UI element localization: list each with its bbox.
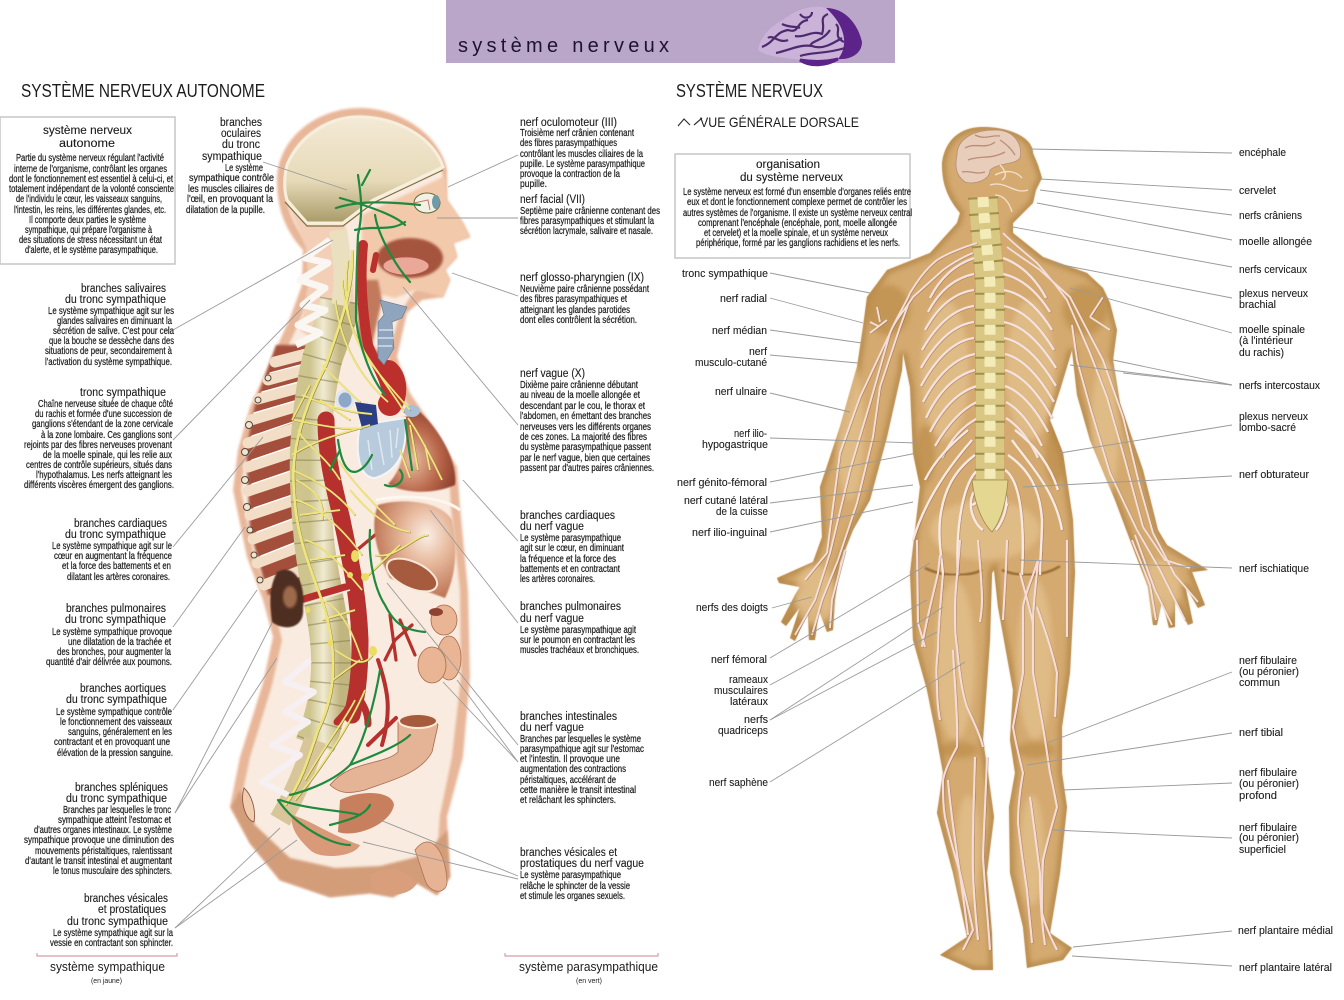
text: branches intestinales du nerf vague: du nerf vague <box>520 722 584 734</box>
text box: système nerveux autonome: sympathique, qui prépare l'organisme à <box>25 225 152 236</box>
text: branches salivaires: situations de peur, secondairement à <box>45 346 172 357</box>
text: branches oculaires: oculaires <box>221 128 261 140</box>
text: nerf facial: Septième paire crânienne contenant des <box>520 206 660 217</box>
bladder and rectum <box>243 788 394 856</box>
text: nerf vague <box>520 368 654 474</box>
text: tronc sympathique: ganglions s'étendant de la zone cervicale <box>32 419 173 430</box>
labels: right side nerves: commun <box>1239 677 1280 689</box>
text: branches spléniques du tronc sympathique: d'autres organes intestinaux. Le système <box>34 825 172 836</box>
text: branches salivaires: glandes salivaires en diminuant la <box>57 316 172 327</box>
illustration: dorsal body with nervous system <box>777 127 1208 970</box>
text box: système nerveux autonome: Il comporte deux parties le système <box>29 215 146 226</box>
labels: right side nerves: nerf tibial <box>1239 727 1283 739</box>
labels: right side nerves: superficiel <box>1239 844 1286 856</box>
text: branches aortiques du tronc sympathique: du tronc sympathique <box>66 694 167 706</box>
labels: right side nerves: cervelet <box>1239 185 1276 197</box>
cervical processes <box>296 240 330 345</box>
labels: right side nerves: nerf plantaire médial <box>1238 925 1333 937</box>
carotid and aortic arch <box>362 245 394 404</box>
text: branches pulmonaires du tronc sympathique: des bronches, pour augmenter la <box>57 647 171 658</box>
text box: organisation du système nerveux: périphérique, formé par les ganglions rachidiens et les nerfs. <box>696 238 900 249</box>
text: branches vésicales du tronc sympathique: Le système sympathique agit sur la <box>53 928 173 939</box>
legend: système parasympathique: système parasympathique <box>519 960 658 974</box>
body shading <box>777 127 1208 970</box>
leg nerves <box>917 540 1067 950</box>
labels: left side nerves: rameaux <box>729 674 769 686</box>
text: branches salivaires: branches salivaires <box>81 283 166 295</box>
text: branches salivaires: du tronc sympathique <box>65 294 166 306</box>
text: branches spléniques du tronc sympathique: le tonus musculaire des sphincters. <box>53 866 172 877</box>
skull rim <box>285 170 443 226</box>
text box: système nerveux autonome: système nerveux <box>43 125 132 137</box>
text: branches oculaires: branches <box>220 117 262 129</box>
text: tronc sympathique: à la zone lombaire. Ces ganglions sont <box>41 430 172 441</box>
text: branches intestinales du nerf vague: et l'intestin. Il provoque une <box>520 754 620 765</box>
text: nerf vague: Dixième paire crânienne débutant <box>520 380 638 391</box>
text box: organisation du système nerveux: Le système nerveux est formé d'un ensemble d'organes reliés entre <box>683 187 911 198</box>
text: branches vésicales du nerf vague: Le système parasympathique <box>520 870 621 881</box>
text: nerf oculomoteur: pupille. Le système parasympathique <box>520 159 645 170</box>
text: branches pulmonaires du nerf vague: Le système parasympathique agit <box>520 625 636 636</box>
leader lines: dorsal diagram <box>770 149 1232 966</box>
text: branches pulmonaires du tronc sympathique: Le système sympathique provoque <box>52 627 172 638</box>
labels: left side nerves: nerf médian <box>712 325 767 337</box>
labels: left side nerves: quadriceps <box>718 725 769 737</box>
text: branches spléniques du tronc sympathique: mouvements péristaltiques, ralentissant <box>35 846 172 857</box>
occipital and neck tissue <box>288 205 355 345</box>
text: branches cardiaques du tronc sympathique: branches cardiaques <box>74 518 167 530</box>
text: branches pulmonaires du nerf vague: branches pulmonaires <box>520 601 621 613</box>
sympathetic chain (yellow) <box>285 250 442 805</box>
external genitalia <box>370 842 447 895</box>
labels: left side nerves: nerfs des doigts <box>696 602 769 614</box>
cranial cavity <box>285 117 443 223</box>
text: nerf oculomoteur: Troisième nerf crânien contenant <box>520 128 634 139</box>
text: tronc sympathique: l'hypothalamus. Les nerfs atteignant les <box>36 470 172 481</box>
text: branches vésicales du tronc sympathique: vessie en contractant son sphincter. <box>50 938 173 949</box>
text: tronc sympathique: tronc sympathique <box>80 387 166 399</box>
text: branches salivaires: l'activation du système sympathique. <box>45 357 172 368</box>
text: nerf facial: fibres parasympathiques et stimulant la <box>520 216 654 227</box>
labels: right side nerves: profond <box>1239 790 1277 802</box>
inner tissue <box>240 116 461 878</box>
text: tronc sympathique: du rachis et formée d'une succession de <box>35 409 172 420</box>
diaphragm line <box>376 497 460 510</box>
text: branches cardiaques du nerf vague <box>520 510 624 585</box>
heading: système nerveux: SYSTÈME NERVEUX <box>676 81 823 101</box>
text: branches spléniques du tronc sympathique <box>24 782 174 877</box>
text: nerf oculomoteur: nerf oculomoteur (III) <box>520 117 617 129</box>
labels: left side nerves: nerf radial <box>720 293 767 305</box>
text: branches cardiaques du nerf vague: du nerf vague <box>520 521 584 533</box>
text: branches salivaires: que la bouche se dessèche dans des <box>49 336 174 347</box>
text box: système nerveux autonome: dont le fonctionnement est essentiel à celui-ci, et <box>9 174 173 185</box>
text: nerf glosso-pharyngien: dont elles contrôlent la sécrétion. <box>520 315 637 326</box>
labels: right side nerves: nerf obturateur <box>1239 469 1309 481</box>
stomach <box>374 501 455 598</box>
text: branches oculaires: les muscles ciliaires de <box>188 184 274 195</box>
labels: right side nerves: moelle allongée <box>1239 236 1312 248</box>
labels: left side nerves: nerf ulnaire <box>715 386 767 398</box>
text box: organisation du système nerveux: comprenant l'encéphale (encéphale, pont, moelle allongée <box>698 218 897 229</box>
text: branches pulmonaires du nerf vague: du nerf vague <box>520 613 584 625</box>
text: nerf oculomoteur: pupille. <box>520 179 547 190</box>
chest cavity <box>388 412 455 492</box>
body silhouette <box>230 108 470 897</box>
text: branches spléniques du tronc sympathique: Branches par lesquelles le tronc <box>63 805 171 816</box>
text: nerf vague: descendant par le cou, le thorax et <box>520 401 645 412</box>
labels: right side nerves: nerfs crâniens <box>1239 210 1303 222</box>
text: branches oculaires: du tronc <box>222 139 260 151</box>
text: branches intestinales du nerf vague: branches intestinales <box>520 711 617 723</box>
text: branches cardiaques du tronc sympathique: du tronc sympathique <box>65 529 166 541</box>
text: branches cardiaques du tronc sympathique: cœur en augmentant la fréquence <box>54 551 172 562</box>
text: branches vésicales du nerf vague <box>520 847 644 902</box>
sacrum <box>972 480 1008 532</box>
text: branches spléniques du tronc sympathique: du tronc sympathique <box>66 793 167 805</box>
labels: right side nerves: nerf plantaire latéral <box>1239 962 1332 974</box>
sacral nerves (white) <box>262 660 314 795</box>
neck muscle <box>358 280 388 372</box>
text box: organisation du système nerveux: autres systèmes de l'organisme. Il existe un système nerveux central <box>683 208 912 219</box>
text: branches salivaires: Le système sympathique agit sur les <box>48 306 174 317</box>
text box: organisation du système nerveux <box>675 154 912 258</box>
text box: organisation du système nerveux: du système nerveux <box>740 172 843 184</box>
text: nerf vague: par le nerf vague, bien que certaines <box>520 453 650 464</box>
labels: left side nerves: de la cuisse <box>716 506 768 518</box>
text: nerf vague: passent par d'autres paires crâniennes. <box>520 463 654 474</box>
text: branches vésicales du tronc sympathique <box>50 893 173 949</box>
text: branches aortiques du tronc sympathique: sanguins, généralement en les <box>68 727 172 738</box>
text: branches pulmonaires du nerf vague: sur le poumon en contractant les <box>520 635 635 646</box>
text: branches oculaires <box>186 117 275 216</box>
labels: left side nerves: tronc sympathique <box>682 268 768 280</box>
text: nerf oculomoteur: contrôlant les muscles ciliaires de la <box>520 149 643 160</box>
labels: right side nerves: nerf fibulaire <box>1239 655 1297 667</box>
labels: right side nerves: nerf fibulaire <box>1239 822 1297 834</box>
buttock fold shadows <box>925 566 1060 575</box>
text: tronc sympathique: rejoints par des fibres nerveuses provenant <box>24 440 172 451</box>
text: branches aortiques du tronc sympathique <box>54 683 173 759</box>
labels: left side nerves: hypogastrique <box>702 439 768 451</box>
text: nerf facial: nerf facial (VII) <box>520 194 585 206</box>
text: branches cardiaques du tronc sympathique: dilatant les artères coronaires. <box>67 572 170 583</box>
text: branches aortiques du tronc sympathique: élévation de la pression sanguine. <box>57 748 173 759</box>
face tissue <box>362 176 470 298</box>
text: branches cardiaques du nerf vague: Le système parasympathique <box>520 533 621 544</box>
text box: système nerveux autonome <box>0 117 175 264</box>
lower body shadow <box>231 790 450 897</box>
labels: right side nerves: brachial <box>1239 299 1276 311</box>
text: branches salivaires <box>45 283 174 368</box>
trachea <box>378 300 407 365</box>
text box: système nerveux autonome: Partie du système nerveux régulant l'activité <box>16 153 164 164</box>
text: branches vésicales du tronc sympathique: et prostatiques <box>98 904 166 916</box>
text: branches intestinales du nerf vague: parasympathique agit sur l'estomac <box>520 744 644 755</box>
illustration: sagittal torso with autonomic nerves <box>230 108 470 897</box>
text: branches intestinales du nerf vague: péristaltiques, accélérant de <box>520 775 616 786</box>
heart <box>337 391 420 478</box>
text: nerf glosso-pharyngien: nerf glosso-pharyngien (IX) <box>520 272 644 284</box>
labels: right side nerves: nerf ischiatique <box>1239 563 1309 575</box>
legend: système sympathique <box>37 953 177 985</box>
descending aorta and arteries <box>300 420 415 745</box>
body silhouette <box>777 127 1208 970</box>
text: nerf oculomoteur <box>520 117 645 190</box>
text: branches cardiaques du nerf vague: battements et en contractant <box>520 564 620 575</box>
back muscles behind ribs <box>246 345 315 595</box>
text: branches aortiques du tronc sympathique: le fonctionnement des vaisseaux <box>60 717 172 728</box>
labels: right side nerves: du rachis) <box>1239 347 1284 359</box>
text box: organisation du système nerveux: et cervelet) et la moelle spinale, et un système nerveux <box>704 228 888 239</box>
text: branches spléniques du tronc sympathique: branches spléniques <box>75 782 168 794</box>
icon: brain <box>758 7 862 65</box>
text: branches aortiques du tronc sympathique: branches aortiques <box>80 683 166 695</box>
ribs <box>248 354 310 585</box>
text: nerf glosso-pharyngien: Neuvième paire crânienne possédant <box>520 284 649 295</box>
labels: left side nerves: nerf cutané latéral <box>684 495 768 507</box>
renal vein highlight <box>302 590 350 605</box>
text box: organisation du système nerveux: organisation <box>756 159 820 171</box>
text: branches pulmonaires du tronc sympathique: branches pulmonaires <box>66 603 166 615</box>
banner title: système nerveux <box>458 35 669 57</box>
spinal column <box>983 197 990 480</box>
labels: right side nerves: encéphale <box>1239 147 1286 159</box>
rib tips <box>242 375 271 583</box>
text: branches vésicales du nerf vague: prostatiques du nerf vague <box>520 858 644 870</box>
text: branches intestinales du nerf vague: cette manière le transit intestinal <box>520 785 636 796</box>
legend: système parasympathique <box>505 953 658 985</box>
right panel: système nerveux vue dorsale <box>675 81 1333 974</box>
text: tronc sympathique: Chaîne nerveuse située de chaque côté <box>38 399 173 410</box>
tongue <box>383 257 429 275</box>
lateral spinal nerves: ribs <box>921 258 1056 458</box>
labels: left side nerves: nerf ilio- <box>734 428 767 440</box>
text: branches intestinales du nerf vague: Branches par lesquelles le système <box>520 734 641 745</box>
text: nerf vague: de ces zones. La majorité des fibres <box>520 432 647 443</box>
left panel: système nerveux autonome <box>0 81 660 985</box>
text: nerf oculomoteur: provoque la contraction de la <box>520 169 620 180</box>
heading: système nerveux autonome: SYSTÈME NERVEUX AUTONOME <box>21 81 265 101</box>
text: branches aortiques du tronc sympathique: contractant et en provoquant une <box>54 737 170 748</box>
text: branches cardiaques du nerf vague: agit sur le cœur, en diminuant <box>520 543 624 554</box>
text: nerf facial <box>520 194 660 237</box>
text: branches oculaires: sympathique <box>202 151 262 163</box>
labels: right side nerves: nerfs intercostaux <box>1239 380 1321 392</box>
labels: left side nerves: musculo-cutané <box>695 357 767 369</box>
text: branches vésicales du nerf vague: relâche le sphincter de la vessie <box>520 881 630 892</box>
legend: système sympathique: système sympathique <box>50 960 165 974</box>
colon <box>330 714 438 792</box>
labels: left side nerves: nerf fémoral <box>711 654 767 666</box>
labels: right side nerves: moelle spinale <box>1239 324 1305 336</box>
labels: left side nerves: nerf <box>749 346 768 358</box>
stomach lining <box>382 552 442 598</box>
subheading: vue générale dorsale: VUE GÉNÉRALE DORSALE <box>700 114 859 130</box>
labels: right side nerves: (à l'intérieur <box>1239 335 1293 347</box>
text box: système nerveux autonome: l'intestin, les reins, les différentes glandes, etc. <box>14 205 166 216</box>
labels: right side nerves <box>1238 147 1333 974</box>
text box: système nerveux autonome: totalement indépendant de la volonté consciente <box>9 184 174 195</box>
text box: système nerveux autonome: d'alerte, et le système parasympathique. <box>25 245 158 256</box>
brachial plexus and arm nerves <box>795 233 1198 635</box>
text: branches spléniques du tronc sympathique: sympathique atteint l'estomac et <box>58 815 171 826</box>
text box: système nerveux autonome: interne de l'organisme, contrôlant les organes <box>14 164 167 175</box>
text: branches cardiaques du nerf vague: les artères coronaires. <box>520 574 595 585</box>
text box: système nerveux autonome: de l'individu le cœur, les vaisseaux sanguins, <box>16 194 162 205</box>
labels: left side nerves: latéraux <box>730 696 769 708</box>
text: branches pulmonaires du tronc sympathique: une dilatation de la trachée et <box>68 637 171 648</box>
text: nerf vague: au niveau de la moelle allongée et <box>520 390 640 401</box>
labels: left side nerves: musculaires <box>714 685 769 697</box>
spine <box>280 230 343 820</box>
text: branches cardiaques du tronc sympathique <box>52 518 172 583</box>
text: branches oculaires: sympathique contrôle <box>189 173 275 184</box>
legend: système parasympathique: (en vert) <box>576 976 602 985</box>
cranial nerves <box>990 165 1028 212</box>
text: nerf glosso-pharyngien <box>520 272 649 326</box>
text: branches pulmonaires du nerf vague: muscles trachéaux et bronchiques. <box>520 645 639 656</box>
text: branches spléniques du tronc sympathique: d'autant le transit intestinal et augmentant <box>25 856 172 867</box>
text: nerf glosso-pharyngien: des fibres parasympathiques et <box>520 294 627 305</box>
text: branches cardiaques du tronc sympathique: Le système sympathique agit sur le <box>52 541 172 552</box>
labels: right side nerves: plexus nerveux <box>1239 411 1309 423</box>
text: nerf facial: sécrétion lacrymale, salivaire et nasale. <box>520 226 653 237</box>
text: branches cardiaques du tronc sympathique: et la force des battements et en <box>62 561 171 572</box>
header banner <box>446 0 895 65</box>
labels: left side nerves <box>677 268 769 789</box>
labels: left side nerves: nerf génito-fémoral <box>677 477 767 489</box>
text: branches pulmonaires du tronc sympathique: quantité d'air délivrée aux poumons. <box>46 657 172 668</box>
text: branches pulmonaires du tronc sympathique: du tronc sympathique <box>65 614 166 626</box>
text: branches oculaires: l'œil, en provoquant la <box>187 194 273 205</box>
text: nerf oculomoteur: des fibres parasympathiques <box>520 138 617 149</box>
text: branches cardiaques du nerf vague: la fréquence et la force des <box>520 554 616 565</box>
intestine opening <box>429 608 443 616</box>
labels: right side nerves: nerf fibulaire <box>1239 767 1297 779</box>
lumbar and pelvic nerves <box>913 430 1062 575</box>
labels: right side nerves: (ou péronier) <box>1239 832 1299 844</box>
text: branches vésicales du nerf vague: et stimule les organes sexuels. <box>520 891 625 902</box>
kidney <box>270 570 303 627</box>
leader lines: autonomic diagram <box>173 155 518 928</box>
ganglia <box>306 550 377 656</box>
text: branches cardiaques du nerf vague: branches cardiaques <box>520 510 615 522</box>
labels: left side nerves: nerfs <box>744 714 769 726</box>
text: branches aortiques du tronc sympathique: Le système sympathique contrôle <box>56 707 172 718</box>
small intestine <box>418 605 461 683</box>
labels: right side nerves: plexus nerveux <box>1239 288 1309 300</box>
labels: right side nerves: (ou péronier) <box>1239 778 1299 790</box>
eye <box>414 193 440 213</box>
labels: left side nerves: nerf saphène <box>709 777 768 789</box>
text: nerf vague: du système parasympathique passent <box>520 442 651 453</box>
text box: système nerveux autonome: autonome <box>59 138 115 150</box>
text: tronc sympathique <box>24 387 174 491</box>
legend: système sympathique: (en jaune) <box>91 976 122 985</box>
text: branches intestinales du nerf vague: et relâchant les sphincters. <box>520 795 616 806</box>
brain <box>956 130 1021 183</box>
text: branches pulmonaires du nerf vague <box>520 601 639 656</box>
labels: left side nerves: nerf ilio-inguinal <box>692 527 767 539</box>
text: nerf vague: nerf vague (X) <box>520 368 585 380</box>
text: branches vésicales du nerf vague: branches vésicales et <box>520 847 618 859</box>
text: branches salivaires: sécrétion de salive. C'est pour cela <box>53 326 174 337</box>
text: branches pulmonaires du tronc sympathique <box>46 603 172 668</box>
labels: right side nerves: (ou péronier) <box>1239 666 1299 678</box>
text box: système nerveux autonome: des situations de stress nécessitant un état <box>19 235 162 246</box>
labels: right side nerves: nerfs cervicaux <box>1239 264 1308 276</box>
text: nerf vague: nerveuses vers les différents organes <box>520 422 651 433</box>
text: nerf vague: l'abdomen, en émettant des branches <box>520 411 651 422</box>
text: nerf glosso-pharyngien: atteignant les glandes parotides <box>520 305 630 316</box>
labels: right side nerves: lombo-sacré <box>1239 422 1296 434</box>
text: branches intestinales du nerf vague: augmentation des contractions <box>520 764 626 775</box>
text: tronc sympathique: de la moelle spinale, qui les relie aux <box>43 450 172 461</box>
oral cavity <box>377 238 443 278</box>
text box: organisation du système nerveux: eux et dont le fonctionnement complexe permet de contrôler les <box>687 197 907 208</box>
text: branches spléniques du tronc sympathique: sympathique provoque une diminution des <box>24 835 174 846</box>
text: tronc sympathique: centres de contrôle supérieurs, situés dans <box>26 460 172 471</box>
text: branches intestinales du nerf vague <box>520 711 644 806</box>
text: tronc sympathique: différents viscères émergent des ganglions. <box>24 480 174 491</box>
text: branches vésicales du tronc sympathique: du tronc sympathique <box>67 916 168 928</box>
parasympathetic nerves (green) <box>278 170 425 845</box>
text: branches oculaires: dilatation de la pupille. <box>186 205 265 216</box>
text: branches vésicales du tronc sympathique: branches vésicales <box>84 893 168 905</box>
text: branches oculaires: Le système <box>225 163 263 174</box>
